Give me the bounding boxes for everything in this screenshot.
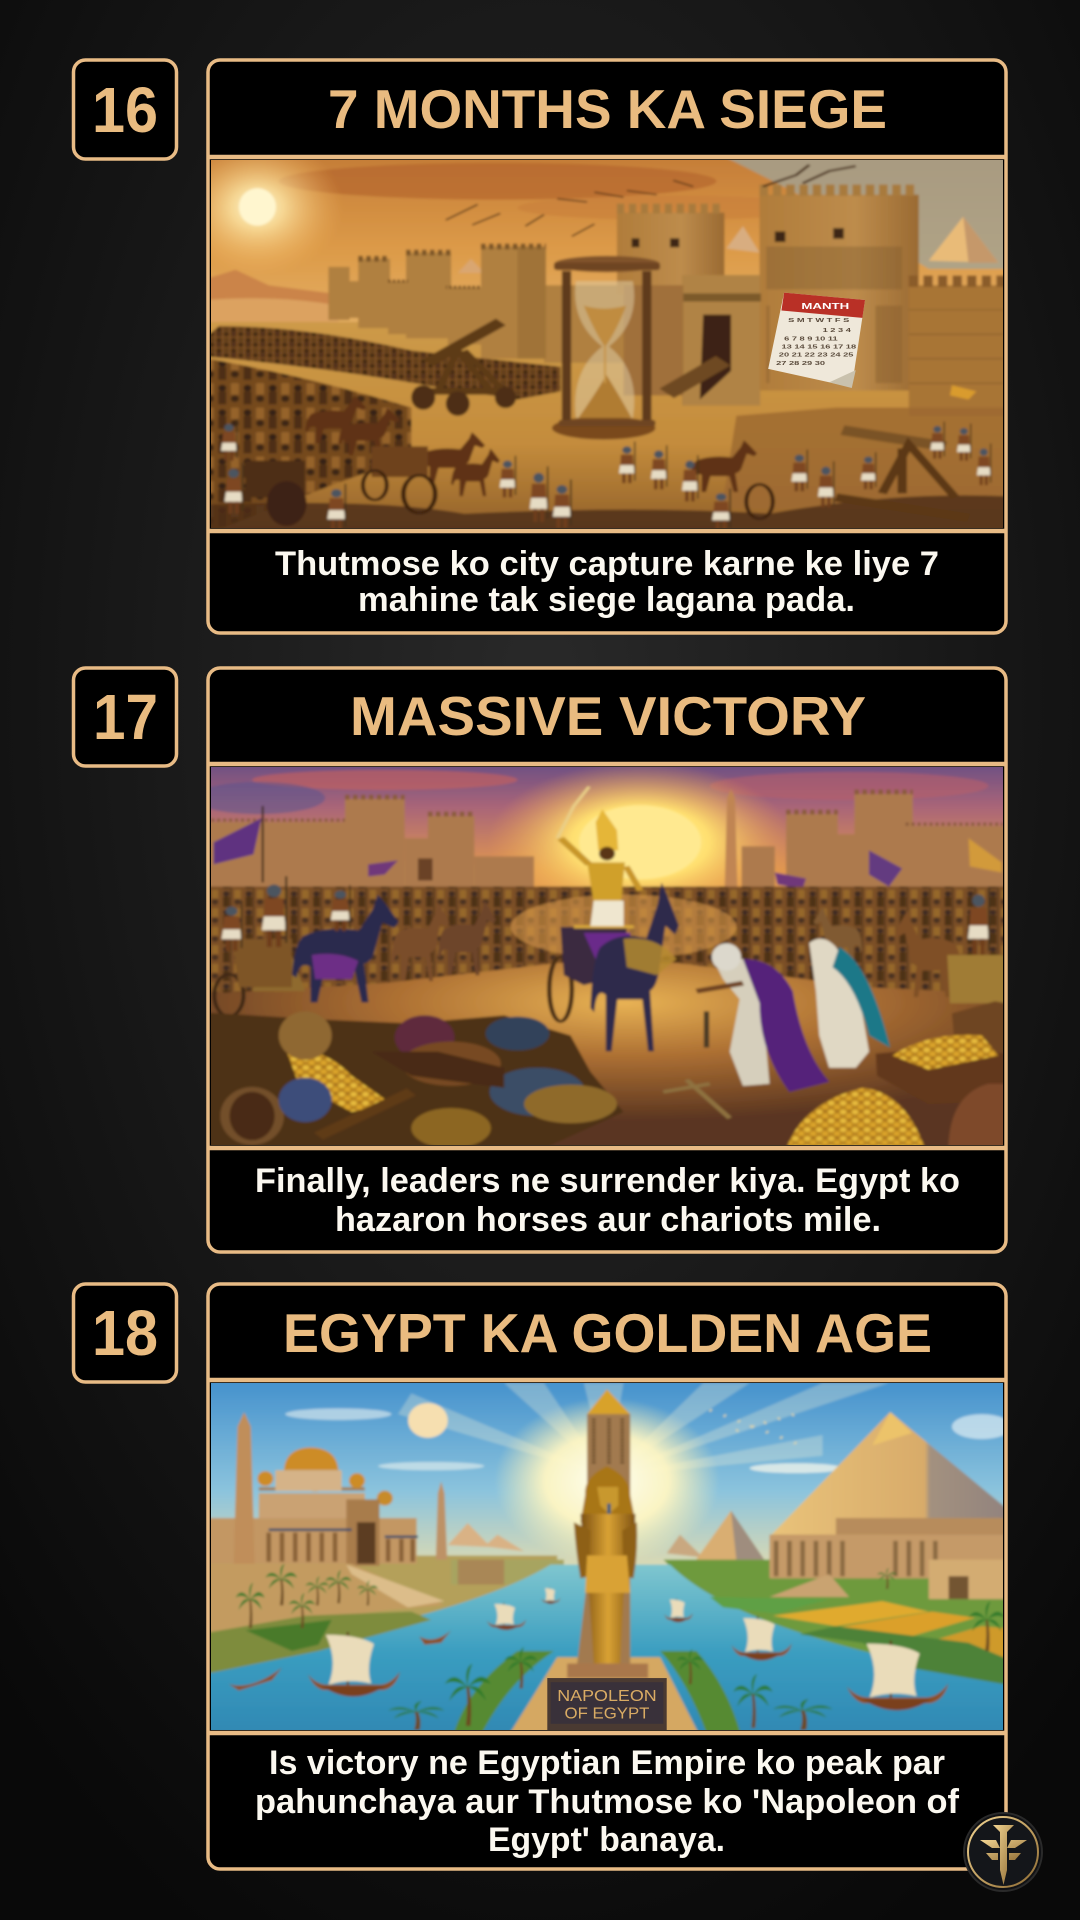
city walls bbox=[186, 794, 1028, 905]
illustration: victory of the pharaoh bbox=[211, 767, 1003, 1145]
divider lines of panel bbox=[208, 764, 1006, 1148]
description 17 bbox=[255, 1162, 960, 1239]
step 18 group bbox=[74, 1284, 1028, 1869]
castle walls far bbox=[328, 246, 624, 363]
calendar: 27 28 29 30 bbox=[776, 360, 825, 366]
step 16 group bbox=[74, 60, 1028, 633]
calendar: 6 7 8 9 10 11 bbox=[784, 335, 839, 342]
calendar: S M T W T F S bbox=[788, 317, 849, 323]
description 18: Is victory ne Egyptian Empire ko peak par bbox=[269, 1744, 945, 1782]
panel: massive victory bbox=[186, 668, 1028, 1252]
calendar bbox=[768, 293, 865, 388]
banners bbox=[214, 818, 261, 864]
divider lines of panel bbox=[208, 1380, 1006, 1733]
cavalry right bbox=[895, 911, 962, 997]
number badge 16 bbox=[74, 60, 176, 159]
divider lines of panel bbox=[208, 157, 1006, 531]
castle towers near bbox=[617, 213, 724, 294]
land base bbox=[186, 1555, 557, 1668]
central causeway bbox=[504, 1657, 703, 1742]
calendar: 20 21 22 23 24 25 bbox=[779, 351, 854, 358]
cannon center bbox=[667, 361, 723, 393]
description 16: mahine tak siege lagana pada. bbox=[358, 581, 855, 619]
description 16 bbox=[275, 545, 939, 619]
calendar: MANTH bbox=[801, 302, 849, 311]
number badge 18 bbox=[74, 1284, 176, 1382]
fields bbox=[773, 1601, 929, 1626]
catapult left bbox=[415, 322, 514, 391]
cavalry left bbox=[438, 901, 496, 975]
calendar: 13 14 15 16 17 18 bbox=[781, 343, 857, 350]
golden statue bbox=[574, 1466, 637, 1664]
number badge 16: 16 bbox=[92, 74, 158, 146]
big pyramid bbox=[770, 1412, 1028, 1543]
palace left bbox=[186, 1518, 417, 1564]
temple right bbox=[770, 1535, 1028, 1578]
description 17: Finally, leaders ne surrender kiya. Egypt ko bbox=[255, 1162, 960, 1200]
panel: 7 months siege bbox=[171, 60, 1028, 633]
number badge 17 bbox=[74, 668, 176, 766]
army mass bbox=[186, 887, 1028, 1011]
description 17: hazaron horses aur chariots mile. bbox=[335, 1201, 881, 1239]
nile water bbox=[186, 1565, 1028, 1742]
heading: massive victory: MASSIVE VICTORY bbox=[350, 685, 866, 747]
ground bbox=[186, 963, 1028, 1160]
calendar: 1 2 3 4 bbox=[823, 327, 852, 334]
description 18: Egypt' banaya. bbox=[488, 1821, 725, 1859]
arrows bbox=[446, 180, 693, 236]
foreground catapult right bbox=[836, 430, 969, 518]
bank left bbox=[186, 1612, 431, 1678]
pedestal with plaque bbox=[547, 1678, 667, 1730]
hourglass bbox=[552, 256, 660, 439]
pedestal with plaque: NAPOLEON bbox=[557, 1687, 657, 1705]
step 17 group bbox=[74, 668, 1028, 1252]
pedestal with plaque: OF EGYPT bbox=[565, 1705, 650, 1722]
sun rays bbox=[398, 1383, 889, 1477]
obelisk behind statue bbox=[577, 1389, 630, 1664]
illustration: egypt golden age bbox=[211, 1383, 1003, 1730]
heading: egypt ka golden age: EGYPT KA GOLDEN AGE bbox=[283, 1302, 932, 1364]
army column bbox=[186, 326, 561, 399]
bank right bbox=[799, 1626, 1028, 1688]
fallen soldiers and gold left bbox=[186, 1011, 624, 1160]
heading: 7 months ka siege: 7 MONTHS KA SIEGE bbox=[328, 78, 887, 140]
keys and debris bbox=[663, 1080, 730, 1118]
panel: golden age bbox=[186, 1284, 1028, 1869]
foot soldiers bbox=[619, 442, 635, 483]
number badge 17: 17 bbox=[93, 681, 158, 753]
boats bbox=[308, 1632, 400, 1697]
palms bbox=[444, 1664, 491, 1726]
distant pyramids bbox=[448, 1523, 524, 1551]
chest and gold bbox=[876, 1048, 1028, 1104]
description 18: pahunchaya aur Thutmose ko 'Napoleon of bbox=[255, 1783, 960, 1821]
description 18 bbox=[255, 1744, 960, 1859]
icon: gold sword and wings logo bbox=[964, 1813, 1042, 1891]
illustration: siege of the city bbox=[211, 160, 1003, 528]
surrendering leaders bbox=[713, 959, 770, 1086]
foreground left chariots and horses bbox=[305, 395, 757, 496]
description 16: Thutmose ko city capture karne ke liye 7 bbox=[275, 545, 939, 583]
number badge 18: 18 bbox=[92, 1297, 158, 1369]
pharaoh chariot bbox=[549, 787, 679, 1051]
